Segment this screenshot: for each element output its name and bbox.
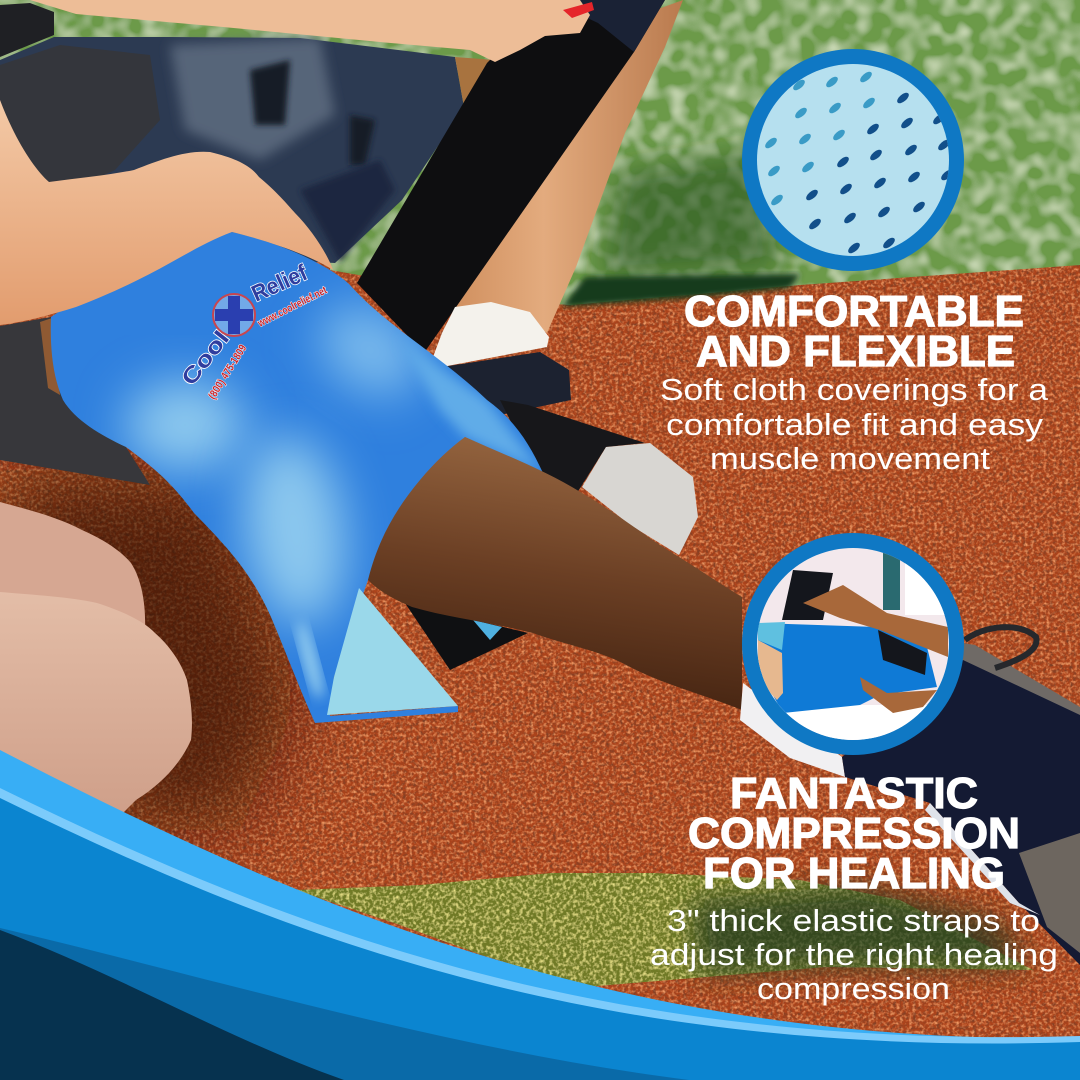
red fingernail [563, 2, 594, 18]
background: green grass [0, 0, 1080, 305]
lower ankle sock [740, 683, 845, 777]
pack fabric highlights [125, 286, 543, 701]
body text: comfortable: Soft cloth coverings for a [660, 372, 1049, 407]
heading: fantastic compression: COMPRESSION [688, 809, 1020, 858]
kneeling knee [0, 592, 192, 816]
blue cold pack [51, 232, 543, 723]
circle: mesh fabric [742, 49, 964, 271]
small mesh sliver [473, 620, 502, 640]
heading: fantastic compression [688, 769, 1020, 898]
cold pack logo: Cool [176, 326, 234, 390]
supporting forearm [0, 100, 333, 325]
body text: compression: adjust for the right healing [650, 937, 1058, 972]
cold pack logo: (800) 475-1809 [206, 343, 249, 402]
heading: fantastic compression: FOR HEALING [703, 849, 1005, 898]
circle: strap demonstration [742, 533, 964, 755]
grass shadow [562, 274, 800, 307]
dark athletic shoe [842, 627, 1080, 965]
heading: comfortable and flexible: COMFORTABLE [684, 287, 1024, 336]
body text: comfortable: muscle movement [710, 441, 990, 476]
shadow under the leg [405, 603, 528, 670]
kneeling upper leg [0, 502, 145, 630]
cold pack logo: www.coolrelief.net [255, 284, 329, 330]
shoe lace loop [965, 627, 1037, 668]
skin behind strap [455, 57, 495, 107]
heading: comfortable and flexible [684, 287, 1024, 376]
heading: comfortable and flexible: AND FLEXIBLE [696, 327, 1015, 376]
black elastic strap [357, 0, 665, 353]
cold pack logo: Relief [247, 259, 311, 307]
heading: fantastic compression: FANTASTIC [730, 769, 978, 818]
cold pack logo [176, 259, 329, 402]
yellow-green turf patch [296, 873, 1033, 987]
white shoe sole [582, 443, 698, 555]
shorts lower left [0, 317, 150, 485]
body text: compression [650, 903, 1058, 1006]
seated person leg [451, 0, 683, 333]
body text: comfortable [660, 372, 1049, 476]
patterned fabric at top left [0, 3, 54, 57]
body text: compression: compression [757, 971, 950, 1006]
body text: compression: 3" thick elastic straps to [667, 903, 1040, 938]
dark shoe [442, 352, 571, 415]
mesh lining [327, 588, 458, 715]
white sock [433, 302, 549, 367]
bottom wave band [0, 750, 1080, 1080]
injured brown leg [368, 437, 742, 710]
black ankle wrap [500, 400, 645, 493]
camouflage shorts [0, 37, 464, 263]
top arm and hand [30, 0, 594, 62]
body text: comfortable: comfortable fit and easy [666, 407, 1044, 442]
grass shade [600, 150, 780, 280]
